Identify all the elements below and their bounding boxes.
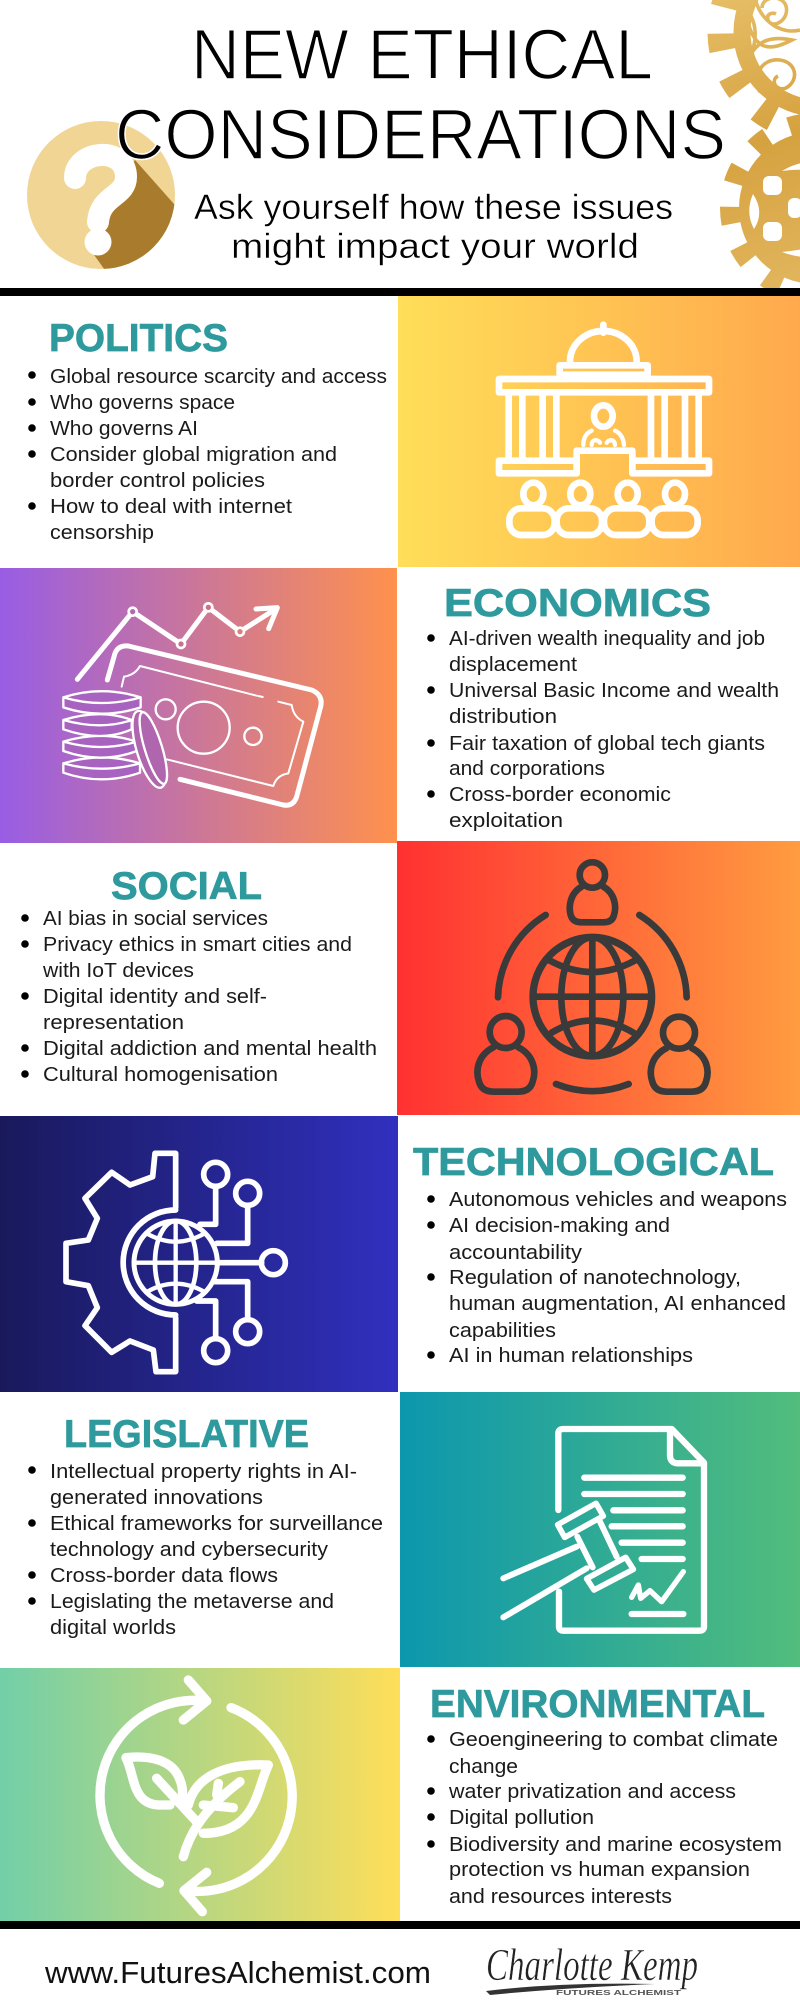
politics list: border control policies	[50, 469, 265, 492]
economics list: and corporations	[449, 757, 605, 780]
politics list	[28, 365, 387, 544]
social list	[21, 907, 377, 1086]
social list: Digital addiction and mental health	[43, 1037, 377, 1060]
icon: leaf in cycle arrows	[100, 1680, 292, 1912]
politics list: Who governs AI	[50, 417, 198, 440]
politics list: Consider global migration and	[50, 443, 337, 466]
title: NEW ETHICAL	[191, 16, 653, 95]
panel: social	[21, 841, 800, 1115]
icon: parliament building	[499, 325, 709, 535]
technological list: human augmentation, AI enhanced	[449, 1292, 786, 1315]
technological heading: TECHNOLOGICAL	[413, 1141, 774, 1184]
economics list: AI-driven wealth inequality and job	[449, 627, 765, 650]
technological list: accountability	[449, 1241, 583, 1264]
panel: environmental	[0, 1668, 782, 1922]
footer signature: Charlotte Kemp	[486, 1939, 698, 1990]
panel: legislative	[28, 1392, 800, 1667]
economics list: Cross-border economic	[449, 783, 671, 806]
legislative gradient panel	[400, 1392, 800, 1667]
environmental list: protection vs human expansion	[449, 1858, 750, 1881]
legislative list: technology and cybersecurity	[50, 1538, 329, 1561]
environmental list: and resources interests	[449, 1885, 672, 1908]
technological list: Autonomous vehicles and weapons	[449, 1188, 787, 1211]
social gradient panel	[397, 841, 800, 1115]
technological gradient panel	[0, 1116, 398, 1392]
social list: AI bias in social services	[43, 907, 268, 930]
footer signature	[486, 1939, 698, 1997]
environmental heading: ENVIRONMENTAL	[430, 1683, 765, 1726]
legislative list: Legislating the metaverse and	[50, 1590, 334, 1613]
icon: people around globe	[477, 862, 708, 1092]
panel: politics	[28, 296, 800, 567]
bottom divider	[0, 1921, 800, 1929]
title: CONSIDERATIONS	[115, 96, 726, 175]
politics list: Global resource scarcity and access	[50, 365, 387, 388]
panel: technological	[0, 1116, 787, 1392]
social list: Cultural homogenisation	[43, 1063, 278, 1086]
environmental list: Geoengineering to combat climate	[449, 1728, 778, 1751]
politics list: How to deal with internet	[50, 495, 292, 518]
politics heading: POLITICS	[49, 317, 228, 360]
economics list: displacement	[449, 653, 577, 676]
technological list: AI decision-making and	[449, 1214, 670, 1237]
economics gradient panel	[0, 568, 397, 843]
subtitle	[194, 188, 673, 266]
technological list: AI in human relationships	[449, 1344, 693, 1367]
social list: with IoT devices	[42, 959, 194, 982]
technological list: Regulation of nanotechnology,	[449, 1266, 741, 1289]
legislative list: digital worlds	[50, 1616, 176, 1639]
environmental list: Biodiversity and marine ecosystem	[449, 1833, 782, 1856]
technological list	[427, 1188, 787, 1367]
icon: gavel and document	[503, 1429, 704, 1631]
environmental list: change	[449, 1755, 518, 1778]
icon: money and coins	[63, 603, 321, 805]
panel: economics	[0, 568, 779, 843]
legislative list: generated innovations	[50, 1486, 263, 1509]
economics heading: ECONOMICS	[444, 582, 711, 625]
legislative heading: LEGISLATIVE	[64, 1413, 309, 1456]
icon: question mark circle	[27, 121, 175, 269]
icon: gold gear bottom	[731, 124, 800, 292]
environmental gradient panel	[0, 1668, 400, 1922]
footer website: www.FuturesAlchemist.com	[44, 1955, 431, 1990]
legislative list: Cross-border data flows	[50, 1564, 278, 1587]
economics list	[427, 627, 779, 832]
legislative list: Intellectual property rights in AI-	[50, 1460, 357, 1483]
environmental list	[427, 1728, 782, 1908]
politics list: censorship	[50, 521, 154, 544]
environmental list: water privatization and access	[448, 1780, 736, 1803]
subtitle: Ask yourself how these issues	[194, 188, 673, 227]
top divider	[0, 288, 800, 296]
footer signature: FUTURES ALCHEMIST	[556, 1988, 682, 1997]
legislative list	[28, 1460, 383, 1639]
economics list: Universal Basic Income and wealth	[449, 679, 779, 702]
social heading: SOCIAL	[111, 865, 262, 908]
social list: representation	[43, 1011, 184, 1034]
legislative list: Ethical frameworks for surveillance	[50, 1512, 383, 1535]
economics list: distribution	[449, 705, 557, 728]
politics gradient panel	[398, 296, 800, 567]
subtitle: might impact your world	[231, 227, 639, 266]
social list: Digital identity and self-	[43, 985, 267, 1008]
economics list: exploitation	[449, 809, 563, 832]
politics list: Who governs space	[50, 391, 235, 414]
title	[115, 16, 726, 175]
environmental list: Digital pollution	[449, 1806, 594, 1829]
icon: gear with globe and circuits	[66, 1153, 285, 1372]
economics list: Fair taxation of global tech giants	[449, 732, 765, 755]
icon: gold gear top	[721, 0, 800, 129]
technological list: capabilities	[449, 1319, 556, 1342]
social list: Privacy ethics in smart cities and	[43, 933, 352, 956]
